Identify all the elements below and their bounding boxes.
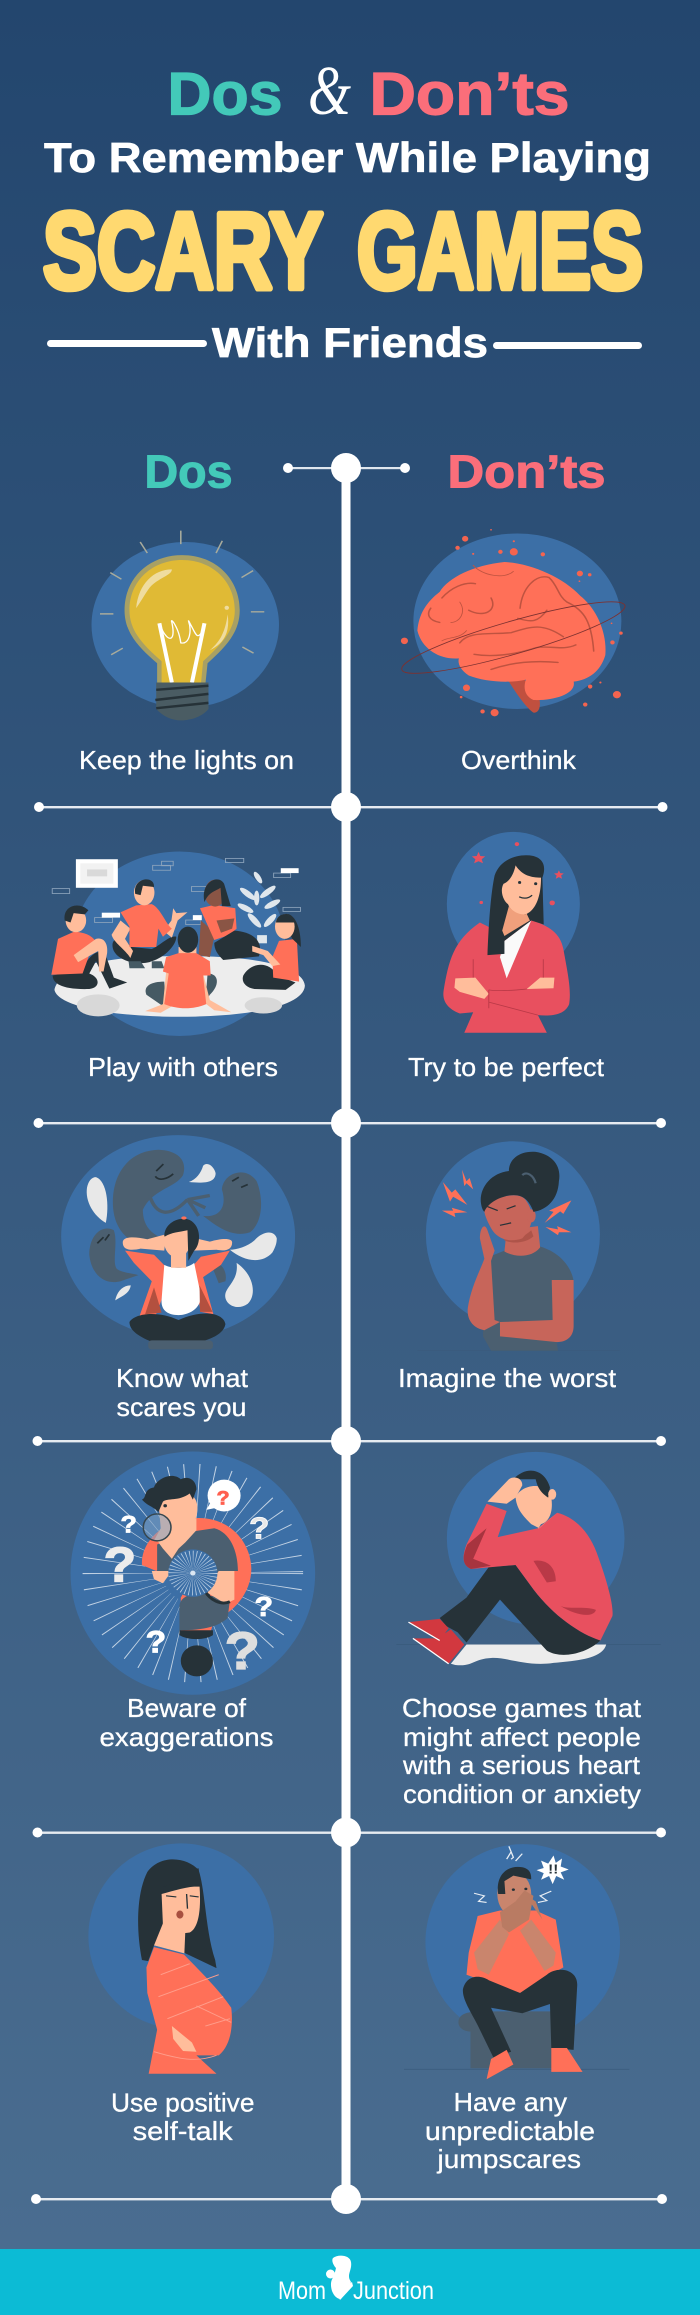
logo: MomJunction bbox=[278, 2256, 434, 2305]
panel: use positive self-talk bbox=[88, 1843, 274, 2146]
label: Try to be perfect bbox=[408, 1052, 605, 1082]
panel: overthink bbox=[396, 529, 630, 775]
label: Choose games that bbox=[402, 1693, 642, 1723]
logo: MomJunction: Junction bbox=[353, 2277, 434, 2305]
label: Have any bbox=[454, 2087, 567, 2117]
label: Play with others bbox=[88, 1052, 278, 1082]
title line: Dos & Don'ts: Don’ts bbox=[370, 60, 570, 128]
icon: man with magnifier and question marks bbox=[71, 1451, 315, 1695]
title line: Dos & Don'ts: & bbox=[308, 53, 351, 130]
label: might affect people bbox=[403, 1722, 641, 1752]
label bbox=[116, 1363, 249, 1422]
icon: group of friends bbox=[51, 851, 305, 1036]
column heading: Don'ts: Don’ts bbox=[448, 446, 606, 498]
label: condition or anxiety bbox=[403, 1779, 641, 1809]
label bbox=[402, 1693, 642, 1809]
title line: SCARY GAMES bbox=[43, 190, 643, 311]
icon: brain bbox=[396, 529, 630, 716]
label: with a serious heart bbox=[402, 1750, 641, 1780]
panel: keep the lights on bbox=[79, 531, 294, 775]
label: scares you bbox=[116, 1392, 246, 1422]
icon: man with magnifier and question marks: ? bbox=[225, 1621, 260, 1680]
column heading: Dos: Dos bbox=[144, 446, 232, 498]
icon: man with magnifier and question marks: ? bbox=[217, 1487, 230, 1509]
figure bbox=[125, 1251, 166, 1320]
panel: know what scares you bbox=[61, 1135, 295, 1422]
label: jumpscares bbox=[436, 2144, 581, 2174]
icon: light bulb bbox=[92, 531, 279, 720]
icon: man with magnifier and question marks: ? bbox=[254, 1592, 273, 1623]
panel: beware of exaggerations bbox=[71, 1451, 315, 1752]
icon: woman surrounded by ghosts bbox=[61, 1135, 295, 1349]
label: self-talk bbox=[133, 2116, 234, 2146]
icon: worried woman with headache bbox=[417, 1141, 620, 1351]
woman D bbox=[199, 920, 215, 957]
logo: MomJunction: Mom bbox=[278, 2277, 326, 2305]
icon: man with magnifier and question marks: ? bbox=[121, 1511, 137, 1538]
person C bbox=[146, 974, 217, 1008]
central timeline with dividers bbox=[31, 453, 668, 2214]
icon: man with magnifier and question marks: ? bbox=[104, 1537, 136, 1592]
label: Keep the lights on bbox=[79, 745, 294, 775]
icon: confident woman bbox=[443, 832, 580, 1033]
plant bbox=[236, 871, 282, 943]
panel: choose games bbox=[396, 1452, 661, 1809]
icon: woman talking to herself bbox=[88, 1843, 274, 2074]
label: unpredictable bbox=[425, 2116, 595, 2146]
label: Overthink bbox=[461, 745, 577, 775]
footer bbox=[0, 2249, 700, 2315]
icon: man sitting with hand on head bbox=[396, 1452, 661, 1665]
icon: scared man sitting: !! bbox=[548, 1862, 558, 1876]
title bbox=[43, 53, 651, 366]
label: Know what bbox=[116, 1363, 249, 1393]
panel: try to be perfect bbox=[408, 832, 605, 1082]
title line: With Friends bbox=[47, 319, 642, 366]
panel: imagine the worst bbox=[398, 1141, 620, 1393]
panel: play with others bbox=[51, 851, 305, 1082]
label: Imagine the worst bbox=[398, 1363, 617, 1393]
label bbox=[425, 2087, 595, 2174]
title line: Dos & Don'ts: Dos bbox=[168, 60, 282, 128]
label bbox=[111, 2088, 254, 2146]
title line: To Remember While Playing: To Remember While Playing bbox=[44, 134, 651, 181]
person B bbox=[112, 937, 176, 963]
label: Use positive bbox=[111, 2088, 254, 2118]
person A bbox=[53, 952, 127, 989]
orange question mark bbox=[142, 1518, 251, 1634]
title line: SCARY GAMES: SCARY bbox=[43, 190, 323, 311]
icon: man with magnifier and question marks: ? bbox=[146, 1625, 166, 1659]
title line: With Friends: With Friends bbox=[212, 319, 488, 366]
panel: have any jumpscares bbox=[404, 1844, 629, 2174]
label: exaggerations bbox=[100, 1722, 274, 1752]
icon: man with magnifier and question marks: ? bbox=[249, 1511, 269, 1545]
label bbox=[100, 1693, 274, 1752]
person E bbox=[243, 965, 296, 990]
title line: Dos & Don'ts bbox=[168, 53, 570, 130]
icon: scared man sitting bbox=[404, 1844, 629, 2079]
label: Beware of bbox=[127, 1693, 247, 1723]
